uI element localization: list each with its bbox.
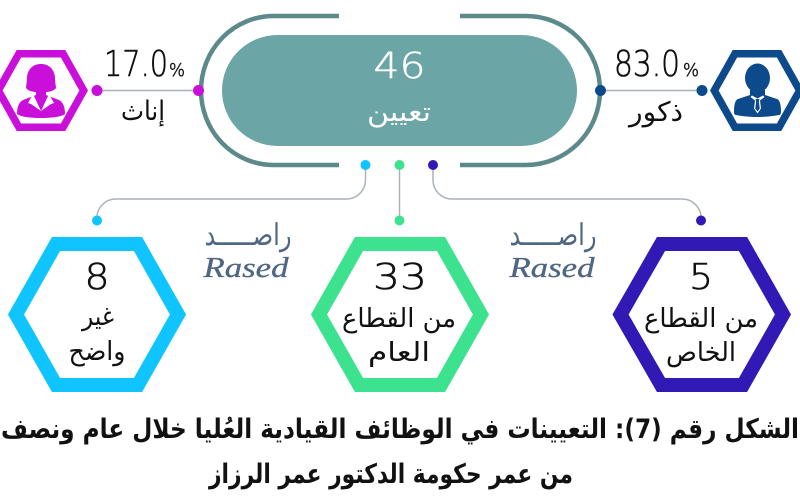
icon: male hexagon	[714, 54, 800, 127]
watermark: Rased left: Rased	[202, 252, 289, 284]
female percentage: 17.0	[104, 44, 168, 85]
male percentage: 83.0	[614, 44, 680, 85]
hexagon: public sector	[319, 244, 481, 385]
hexagon: public sector: 33	[373, 257, 427, 298]
hexagon: unclear: غير	[80, 302, 114, 332]
female label: إناث	[121, 96, 165, 127]
male percentage: %	[683, 60, 699, 81]
connector: public sector to centre	[394, 160, 404, 226]
caption: الشكل رقم (7): التعيينات في الوظائف القيادية العُليا خلال عام ونصف	[1, 414, 799, 445]
watermark: Rased left: راصـــــد	[204, 218, 292, 253]
connector: unclear to centre	[92, 160, 370, 226]
central panel: total appointments: تعيين	[367, 97, 431, 128]
hexagon: private sector	[620, 244, 783, 385]
connector: private sector to centre	[428, 160, 706, 226]
watermark: Rased left	[202, 218, 292, 284]
watermark: Rased right	[508, 218, 596, 284]
hexagon: unclear: واضح	[68, 337, 126, 367]
hexagon: public sector: العام	[368, 338, 430, 368]
male connector	[595, 85, 708, 96]
hexagon: private sector: الخاص	[666, 338, 736, 368]
caption	[1, 414, 799, 490]
caption: من عمر حكومة الدكتور عمر الرزاز	[207, 459, 573, 490]
outer bracket: left arc	[201, 16, 339, 165]
hexagon: unclear	[16, 244, 178, 385]
central panel: total appointments	[222, 35, 577, 146]
female connector	[92, 85, 204, 96]
hexagon: private sector: من القطاع	[644, 304, 758, 334]
watermark: Rased right: راصـــــد	[510, 218, 596, 253]
icon: female hexagon	[0, 54, 84, 127]
watermark: Rased right: Rased	[508, 252, 595, 284]
hexagon: public sector: من القطاع	[342, 304, 456, 334]
male label: ذكور	[627, 97, 683, 128]
female percentage: %	[169, 60, 185, 81]
central panel: total appointments: 46	[374, 46, 426, 87]
hexagon: private sector: 5	[689, 257, 713, 298]
hexagon: unclear: 8	[84, 257, 110, 298]
outer bracket: right arc	[460, 16, 600, 165]
